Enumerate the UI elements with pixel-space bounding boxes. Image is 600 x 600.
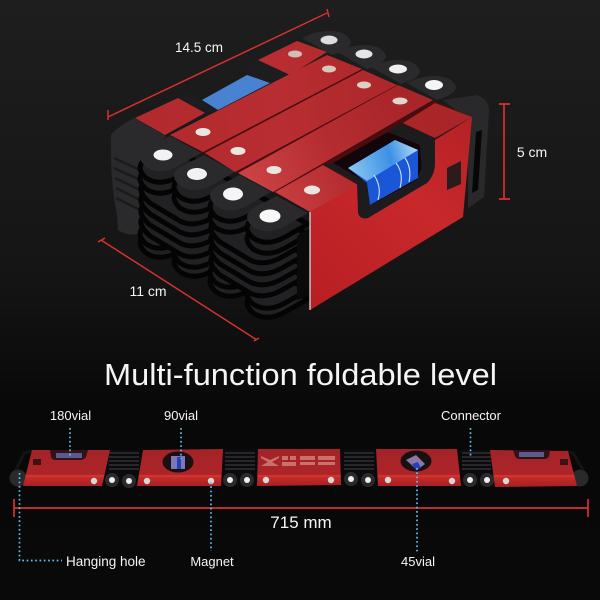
black folded ribs	[140, 147, 308, 317]
dimension: 14.5 cm	[108, 9, 329, 120]
magnets	[154, 36, 443, 222]
connectors	[102, 449, 496, 486]
blue vial	[348, 140, 418, 205]
hanging slot	[472, 130, 482, 193]
label: 45vial: 45vial	[401, 554, 435, 569]
folded level product photo	[111, 31, 489, 317]
label: 90vial: 90vial	[164, 408, 198, 423]
knuckle tabs	[140, 31, 456, 231]
90 vial	[162, 452, 194, 472]
label: Hanging hole: Hanging hole	[66, 554, 146, 569]
left end cap	[111, 118, 166, 235]
label: 5 cm: 5 cm	[517, 144, 547, 160]
small square holes	[33, 459, 568, 465]
label: 14.5 cm: 14.5 cm	[175, 40, 223, 55]
right end cap	[443, 95, 489, 208]
title: Multi-function foldable level	[104, 357, 497, 392]
logo on center segment	[261, 456, 335, 466]
red segments	[23, 449, 577, 487]
side recess	[447, 161, 461, 190]
label: 180vial: 180vial	[50, 408, 91, 423]
label: Magnet: Magnet	[190, 554, 234, 569]
label: 11 cm: 11 cm	[129, 283, 167, 299]
left handle	[10, 451, 33, 486]
connector ribs	[109, 453, 491, 469]
inner channel	[297, 228, 310, 300]
magnets on bar	[91, 477, 509, 484]
vial opening	[333, 132, 422, 205]
45 vial	[400, 450, 432, 472]
dotted leader lines	[20, 428, 470, 560]
vial window frame	[323, 123, 435, 218]
dimension: 5 cm	[499, 104, 510, 199]
unfolded level bar	[10, 449, 588, 488]
red top strips	[135, 41, 472, 212]
dimension: 715 mm	[14, 499, 588, 517]
right handle	[565, 451, 588, 486]
label: Connector: Connector	[441, 408, 502, 423]
label: 715 mm: 715 mm	[270, 513, 332, 532]
dimension: 11 cm	[98, 238, 259, 341]
back vial	[202, 75, 270, 110]
strip gaps backing	[170, 55, 472, 212]
roll pins	[109, 476, 490, 484]
red side face	[310, 117, 472, 310]
180 vials	[50, 450, 550, 460]
connector rolls	[105, 472, 494, 488]
back black frames	[178, 60, 288, 115]
